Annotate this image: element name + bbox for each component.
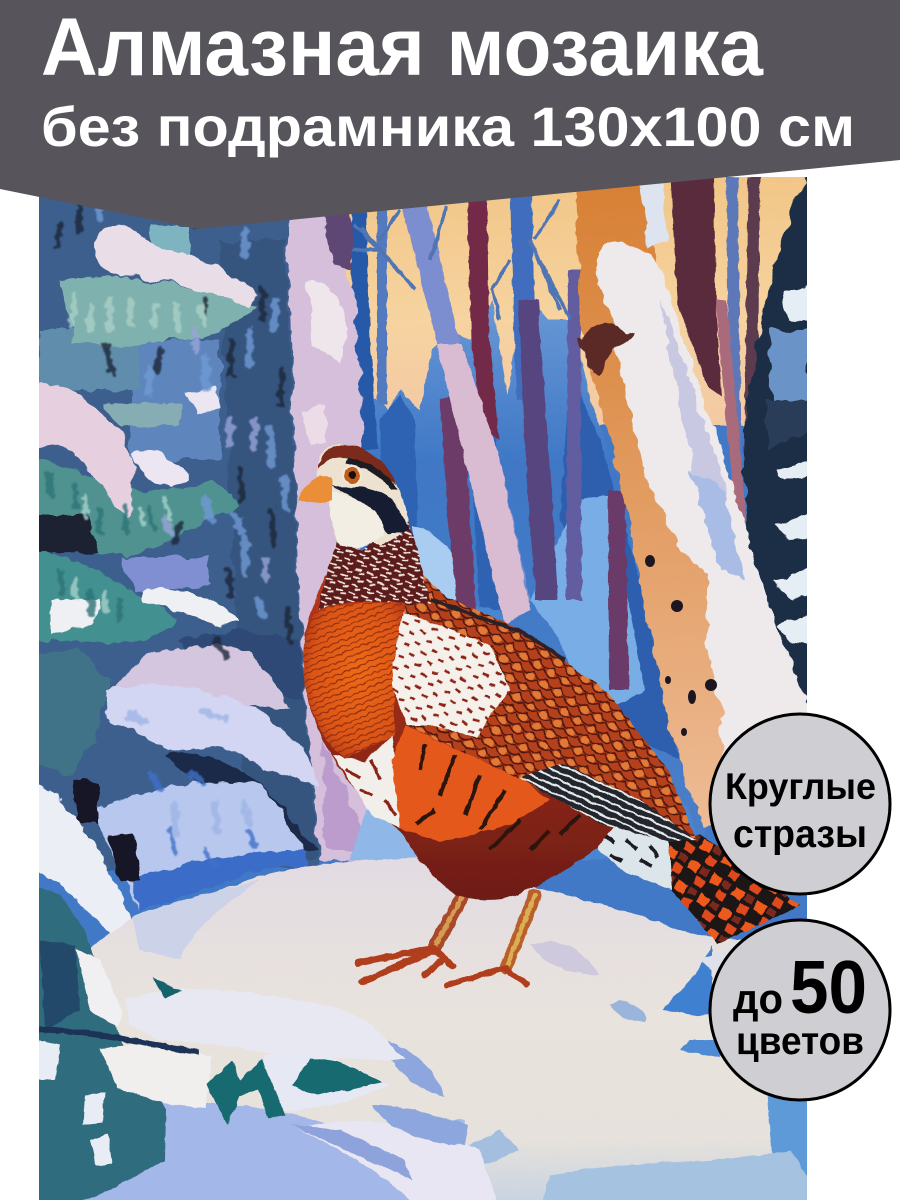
legs and feet xyxy=(358,895,535,985)
badge: up to 50 colours: до xyxy=(733,975,783,1022)
body xyxy=(303,575,615,900)
white throat xyxy=(329,490,385,547)
snowy ground xyxy=(91,810,807,1200)
badge: up to 50 colours xyxy=(710,920,890,1100)
brow stripe xyxy=(346,458,398,490)
head xyxy=(316,444,409,546)
orange flank xyxy=(392,725,550,842)
striped flight feathers xyxy=(520,763,696,842)
tail xyxy=(665,834,800,944)
beak xyxy=(298,476,332,503)
title: Алмазная мозаика xyxy=(41,2,764,93)
background forest: sky, trees, blue snow xyxy=(39,177,807,948)
back dark edge xyxy=(430,600,565,660)
black mask xyxy=(328,484,410,535)
badge: up to 50 colours: цветов xyxy=(736,1020,864,1063)
rump xyxy=(597,823,672,890)
lavender tree trunk xyxy=(282,210,372,862)
breast feathers xyxy=(303,600,405,758)
eye xyxy=(342,465,362,485)
right birch trunk with snow xyxy=(575,177,807,828)
badge: round rhinestones: стразы xyxy=(733,813,867,856)
badge: round rhinestones: Круглые xyxy=(725,766,876,807)
bird xyxy=(298,444,800,985)
lower fir branches with snow xyxy=(20,880,500,1200)
wing xyxy=(393,565,695,838)
bark spots xyxy=(645,555,717,736)
white chest patch xyxy=(333,735,400,828)
header banner xyxy=(0,0,900,229)
white scaled patch xyxy=(393,612,510,738)
badge: round rhinestones xyxy=(710,714,890,894)
subtitle: без подрамника 130х100 см xyxy=(41,95,855,158)
neck xyxy=(317,520,430,610)
cap xyxy=(318,445,397,486)
painting: snowy forest with bird xyxy=(20,165,830,1200)
badge: up to 50 colours: 50 xyxy=(790,945,867,1029)
left fir tree xyxy=(20,185,320,938)
fir brush strokes xyxy=(50,200,290,866)
